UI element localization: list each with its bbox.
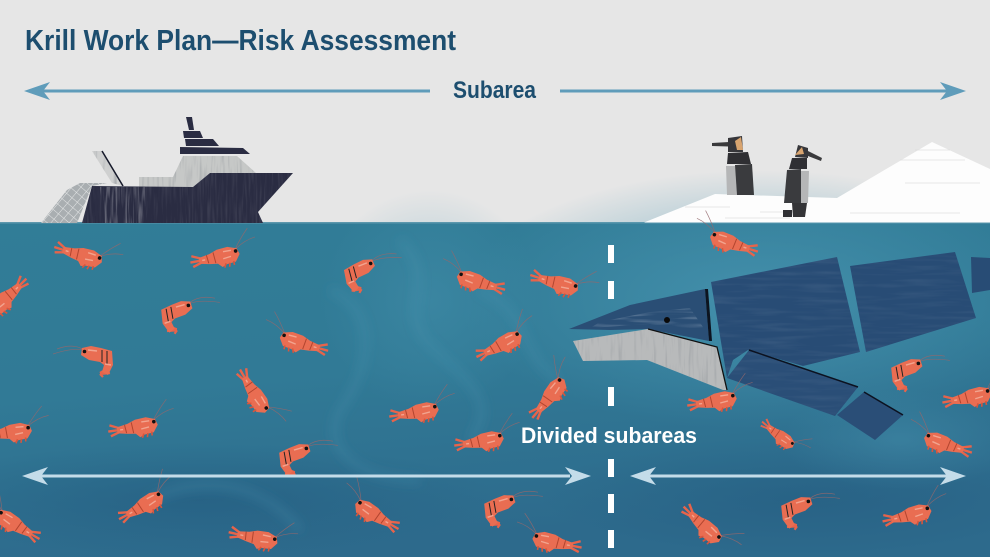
ocean background — [0, 170, 990, 557]
ship net — [41, 183, 107, 223]
icon: ice shelf — [644, 142, 990, 222]
arrow: lower left subarea — [22, 467, 591, 485]
ship superstructure — [139, 156, 256, 187]
title: Krill Work Plan—Risk Assessment — [25, 25, 456, 57]
icon: penguin left — [712, 136, 754, 195]
whale flipper — [727, 350, 858, 416]
arrow: lower right subarea — [630, 467, 966, 485]
arrow: subarea left — [24, 82, 430, 100]
krill swarm — [0, 209, 990, 557]
whale upper head — [569, 289, 712, 341]
arrow: subarea right — [560, 82, 966, 100]
icon: research ship — [41, 117, 293, 223]
whale flipper tip — [837, 392, 903, 440]
whale body rear — [850, 252, 976, 352]
label: divided subareas: Divided subareas — [521, 423, 697, 448]
ship hull — [82, 173, 293, 223]
ship bridge decks — [180, 117, 250, 154]
label: subarea: Subarea — [453, 77, 537, 104]
whale body front — [711, 257, 860, 378]
whale tail segment — [971, 257, 990, 293]
ship stern flap — [92, 151, 123, 186]
sky background — [0, 0, 990, 223]
whale lower jaw — [573, 329, 727, 390]
icon: whale — [569, 252, 990, 440]
divider: dashed line — [608, 245, 614, 548]
icon: penguin right — [783, 145, 822, 217]
